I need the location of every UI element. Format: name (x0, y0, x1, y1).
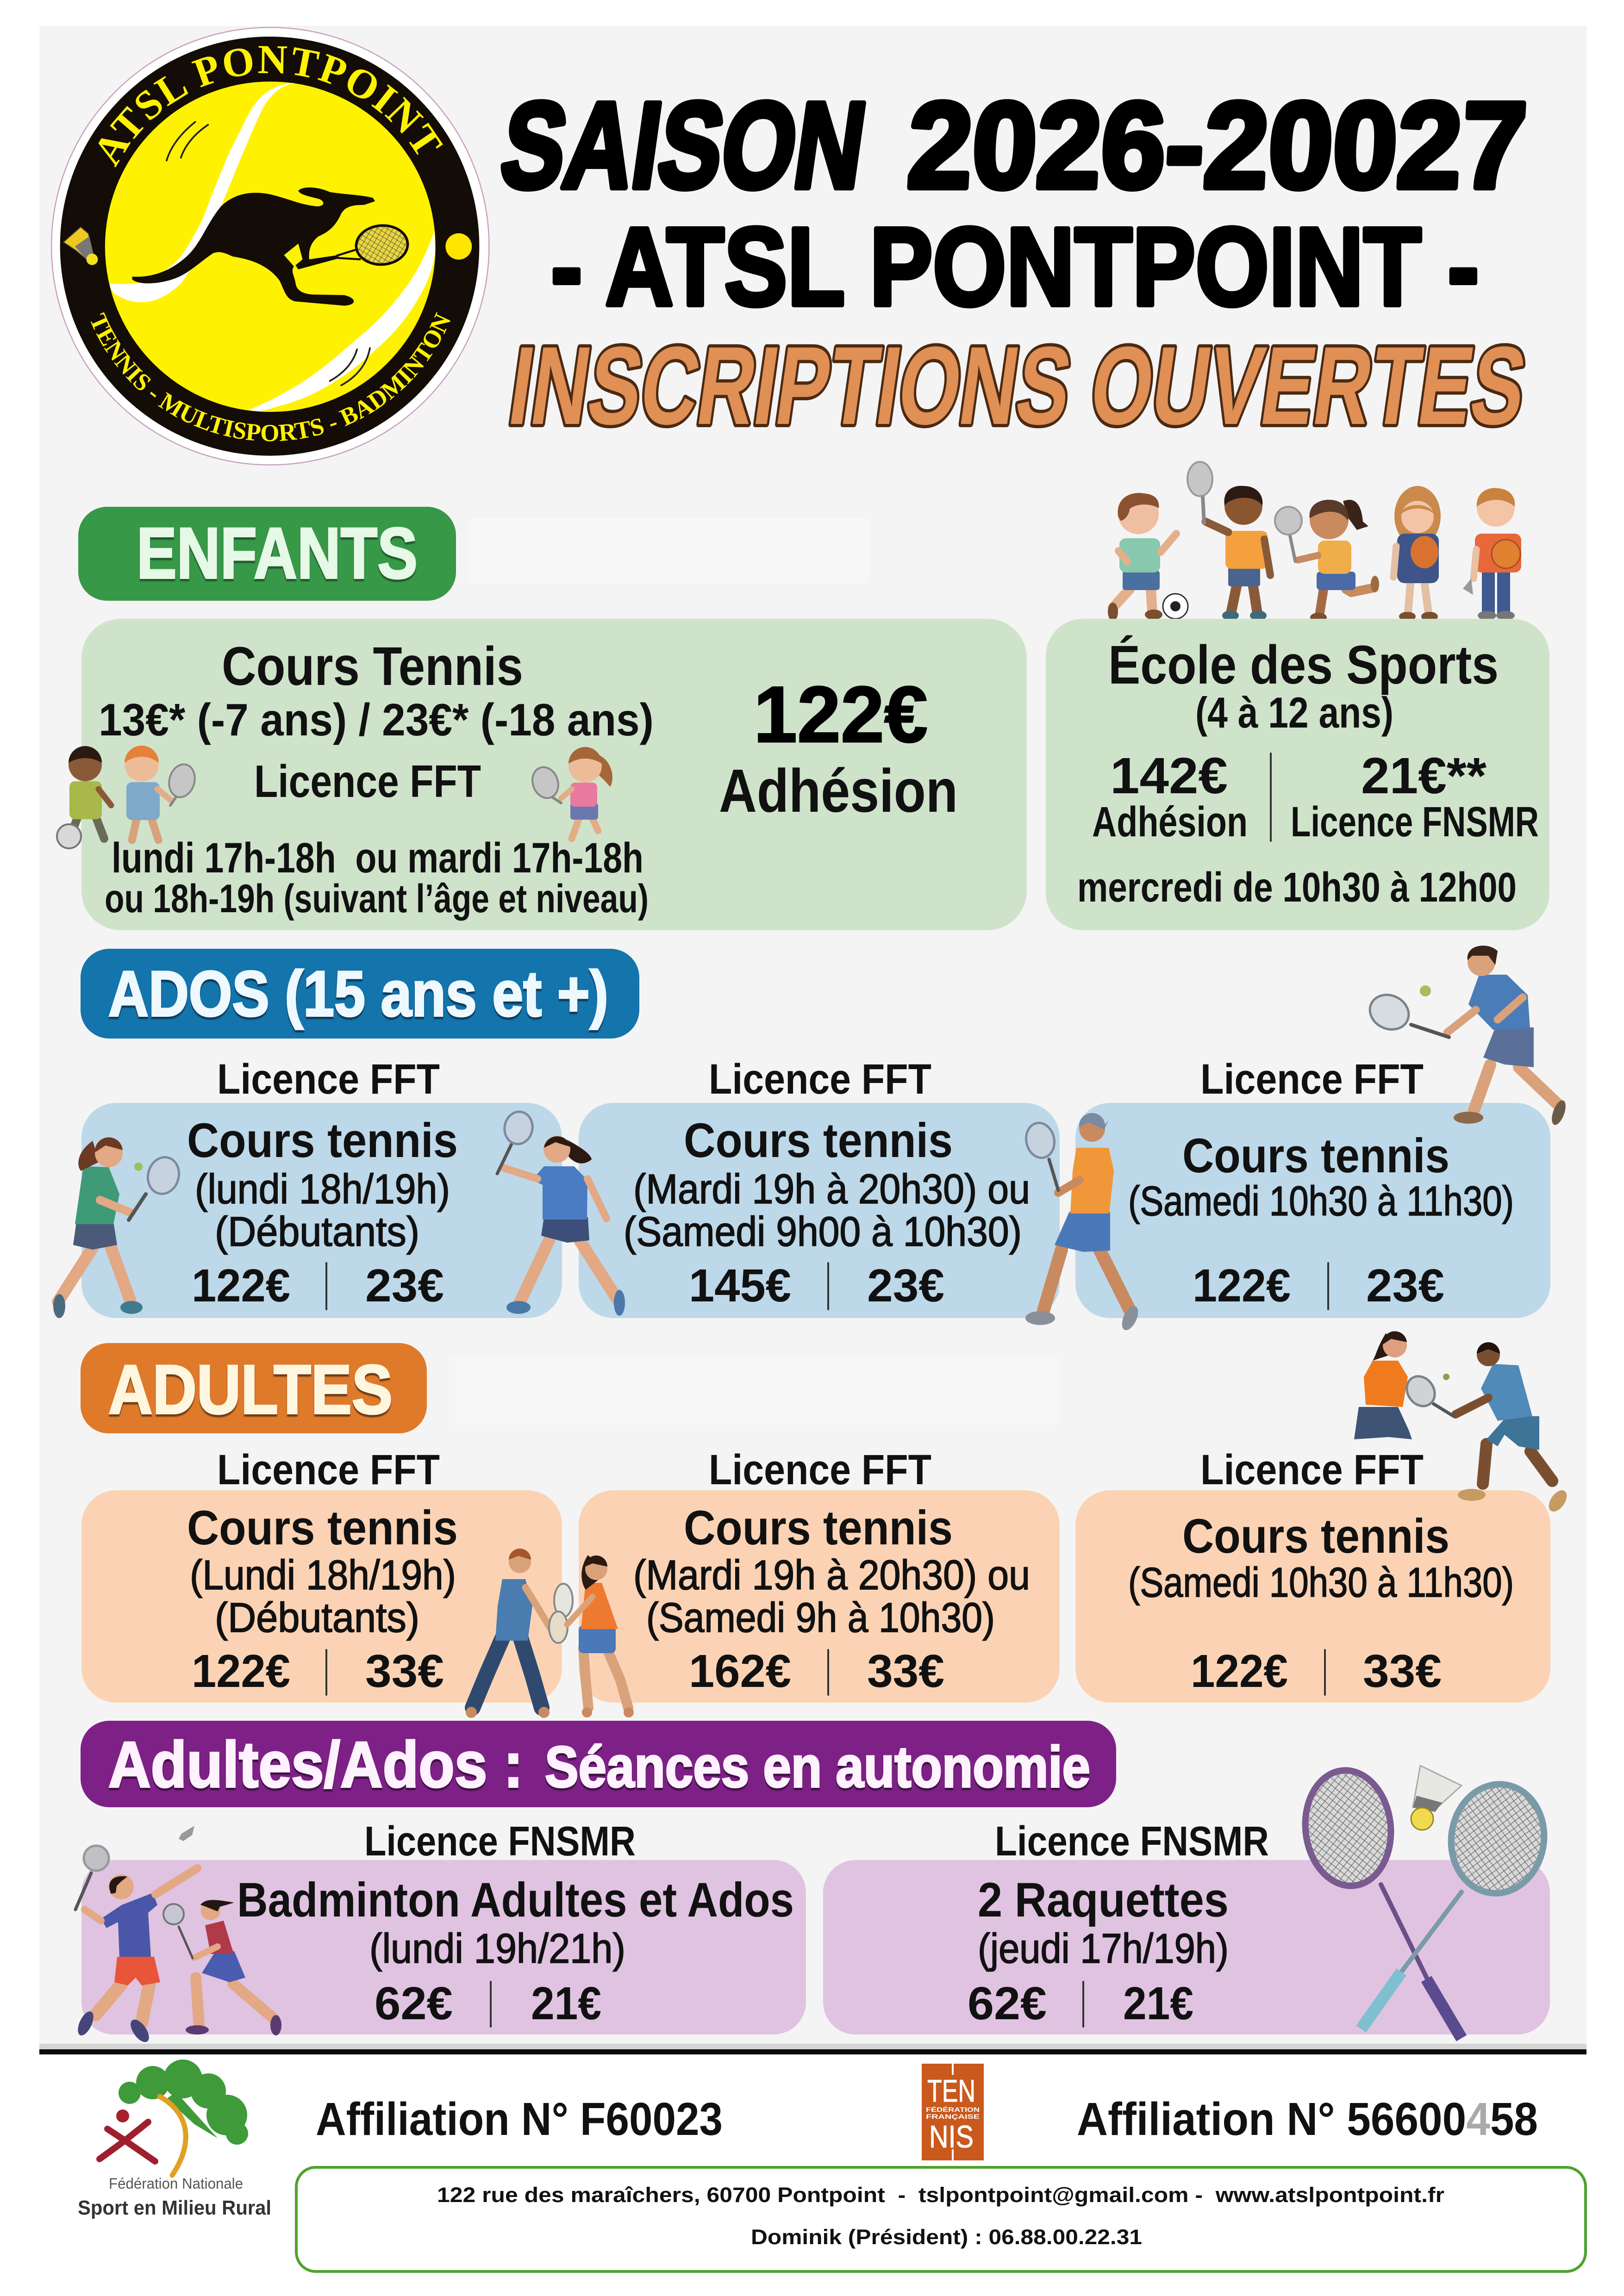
icon: kangaroo (132, 187, 375, 306)
horaire 1: (Mardi 19h à 20h30) ou (633, 1166, 1030, 1213)
boy with racket (1187, 462, 1270, 621)
logo: FFT tennis: TEN (927, 2073, 975, 2109)
prix adhesion: 122€ (754, 670, 928, 759)
panel: ados lundi (81, 1103, 562, 1318)
heading: Cours tennis (684, 1501, 953, 1555)
horaire: (lundi 18h/19h) (195, 1166, 450, 1213)
title: saison (493, 77, 1530, 214)
icon: shuttlecock (1411, 1766, 1462, 1830)
girl with racket and ponytail (1275, 500, 1379, 622)
prix licence: 21€** (1361, 747, 1487, 804)
prix licence: 23€ (1366, 1260, 1444, 1312)
icon: shuttlecock in logo (63, 227, 98, 265)
horaire: (Samedi 10h30 à 11h30) (1128, 1560, 1514, 1606)
horaire: (jeudi 17h/19h) (978, 1926, 1229, 1972)
illustration: adult pair top right (1354, 1331, 1570, 1515)
licence label ados 1: Licence FFT (217, 1056, 440, 1103)
niveau: (Débutants) (215, 1595, 419, 1641)
niveau: (Débutants) (215, 1209, 419, 1255)
section heading: adultes ados autonomie: Adultes/Ados : (108, 1728, 523, 1801)
girl with basketball (1393, 486, 1441, 621)
president line: Dominik (Président) : 06.88.00.22.31 (751, 2225, 1142, 2249)
horaire 1: (Mardi 19h à 20h30) ou (633, 1552, 1030, 1599)
section heading: enfants: ENFANTS (137, 513, 418, 594)
icon: racket in logo (337, 224, 409, 266)
horaires ligne 2: ou 18h-19h (suivant l’âge et niveau) (105, 877, 649, 921)
horaire 2: (Samedi 9h00 à 10h30) (624, 1209, 1022, 1255)
heading: Cours Tennis (222, 636, 523, 697)
illustration: girl green shirt (53, 1137, 183, 1318)
prix adhesion: 122€ (1193, 1260, 1291, 1312)
prix licence: 21€ (531, 1978, 601, 2029)
prix licence: 33€ (365, 1645, 444, 1697)
heading: Cours tennis (1182, 1509, 1449, 1563)
horaire 2: (Samedi 9h à 10h30) (646, 1595, 995, 1641)
panel: adultes lundi (81, 1490, 562, 1703)
heading: Cours tennis (187, 1114, 458, 1168)
licence label 2 raquettes: Licence FNSMR (995, 1818, 1269, 1865)
boy with ball (1463, 488, 1521, 620)
section heading: ados: ADOS (15 ans et +) (108, 958, 608, 1030)
illustration: two children with racket (57, 746, 198, 848)
footer band (39, 2044, 1587, 2050)
licence: Licence FFT (254, 756, 481, 807)
licence label adultes 3: Licence FFT (1200, 1446, 1424, 1493)
prix licence: 33€ (1363, 1645, 1442, 1697)
panel: adultes samedi (1075, 1490, 1550, 1703)
icon: tennis ball in logo (445, 233, 472, 260)
illustration: badminton players (75, 1826, 281, 2045)
section heading: adultes ados autonomie: Séances en autonomie (545, 1735, 1090, 1799)
tarifs licence: 13€* (-7 ans) / 23€* (-18 ans) (99, 694, 654, 745)
heading: 2 Raquettes (978, 1873, 1229, 1927)
heading: Cours tennis (187, 1501, 458, 1555)
heading: École des Sports (1108, 635, 1499, 696)
illustration: girl blue shirt (497, 1109, 625, 1316)
horaire: (Samedi 10h30 à 11h30) (1128, 1178, 1514, 1225)
age: (4 à 12 ans) (1195, 688, 1393, 737)
panel: ecole des sports (1046, 619, 1549, 930)
section heading: adultes: ADULTES (108, 1350, 393, 1428)
section heading: adultes ados autonomie (81, 1721, 1116, 1807)
address line: 122 rue des maraîchers, 60700 Pontpoint - tslpontpoint@gmail.com - www.atslpontpoint.fr (437, 2183, 1444, 2207)
logo bottom text: TENNIS - MULTISPORTS - BADMINTON (84, 310, 456, 447)
panel: adultes mardi samedi (579, 1490, 1060, 1703)
logo: FFT tennis: FRANÇAISE (926, 2113, 980, 2120)
affiliation number FFT: Affiliation N° 56600458 (1077, 2093, 1538, 2145)
panel: 2 raquettes (823, 1860, 1550, 2035)
horaires: mercredi de 10h30 à 12h00 (1077, 865, 1517, 911)
horaires ligne 1: lundi 17h-18h ou mardi 17h-18h (112, 834, 643, 882)
horaire: (Lundi 18h/19h) (190, 1552, 456, 1599)
prix adhesion: 122€ (1191, 1645, 1288, 1697)
contact box (296, 2167, 1586, 2271)
illustration: tennis player top right ados (1364, 946, 1568, 1126)
horaire: (lundi 19h/21h) (369, 1926, 625, 1972)
panel: ados mardi samedi (579, 1103, 1060, 1318)
prix adhesion: 62€ (375, 1978, 453, 2029)
prix licence: 23€ (365, 1260, 444, 1312)
logo: FFT tennis: FÉDÉRATION (926, 2106, 980, 2113)
footer black rule (39, 2049, 1587, 2054)
prix adhesion: 162€ (689, 1645, 791, 1697)
logo: FFT tennis: NIS (929, 2119, 974, 2154)
logo: FFT tennis (922, 2064, 984, 2160)
title: saison: 2026-20027 (905, 77, 1530, 213)
prix adhesion: 62€ (968, 1978, 1047, 2029)
logo: Sport en Milieu Rural (78, 2060, 271, 2219)
illustration: group of children (1108, 462, 1521, 622)
licence label badminton: Licence FNSMR (364, 1818, 636, 1865)
heading: Cours tennis (684, 1114, 953, 1168)
organisation name: Sport en Milieu Rural (78, 2196, 271, 2219)
label licence: Licence FNSMR (1291, 798, 1539, 846)
federation label: Fédération Nationale (109, 2175, 243, 2192)
illustration: crossed badminton rackets (1299, 1766, 1551, 2038)
prix adhesion: 122€ (192, 1645, 290, 1697)
licence label adultes 1: Licence FFT (217, 1446, 440, 1493)
licence label ados 2: Licence FFT (709, 1056, 931, 1103)
prix adhesion: 122€ (192, 1260, 290, 1312)
label adhesion: Adhésion (1092, 798, 1248, 846)
licence label adultes 2: Licence FFT (709, 1446, 931, 1493)
icon: red running figure (100, 2109, 155, 2161)
logo top text: ATSL PONTPOINT (84, 37, 451, 173)
illustration: girl with racket (528, 747, 612, 839)
prix licence: 21€ (1123, 1978, 1193, 2029)
panel: ados samedi (1075, 1103, 1550, 1318)
prix licence: 33€ (867, 1645, 944, 1697)
prix adhesion: 142€ (1110, 747, 1228, 804)
illustration: man orange shirt (1023, 1113, 1142, 1332)
boy with football (1108, 493, 1188, 621)
prix licence: 23€ (867, 1260, 944, 1312)
illustration: adult pair centre (466, 1549, 634, 1718)
licence label ados 3: Licence FFT (1200, 1056, 1424, 1103)
label adhesion: Adhésion (719, 757, 958, 825)
panel: cours tennis enfants (81, 619, 1027, 930)
heading: Badminton Adultes et Ados (237, 1873, 794, 1927)
panel: badminton (81, 1860, 806, 2035)
heading: Cours tennis (1182, 1129, 1449, 1183)
logo: ATSL Pontpoint (51, 27, 489, 465)
title: saison: SAISON (493, 77, 874, 214)
title: club name: - ATSL PONTPOINT - (551, 205, 1479, 329)
affiliation number FNSMR: Affiliation N° F60023 (316, 2093, 723, 2145)
section heading: enfants (78, 507, 456, 601)
prix adhesion: 145€ (689, 1260, 791, 1312)
